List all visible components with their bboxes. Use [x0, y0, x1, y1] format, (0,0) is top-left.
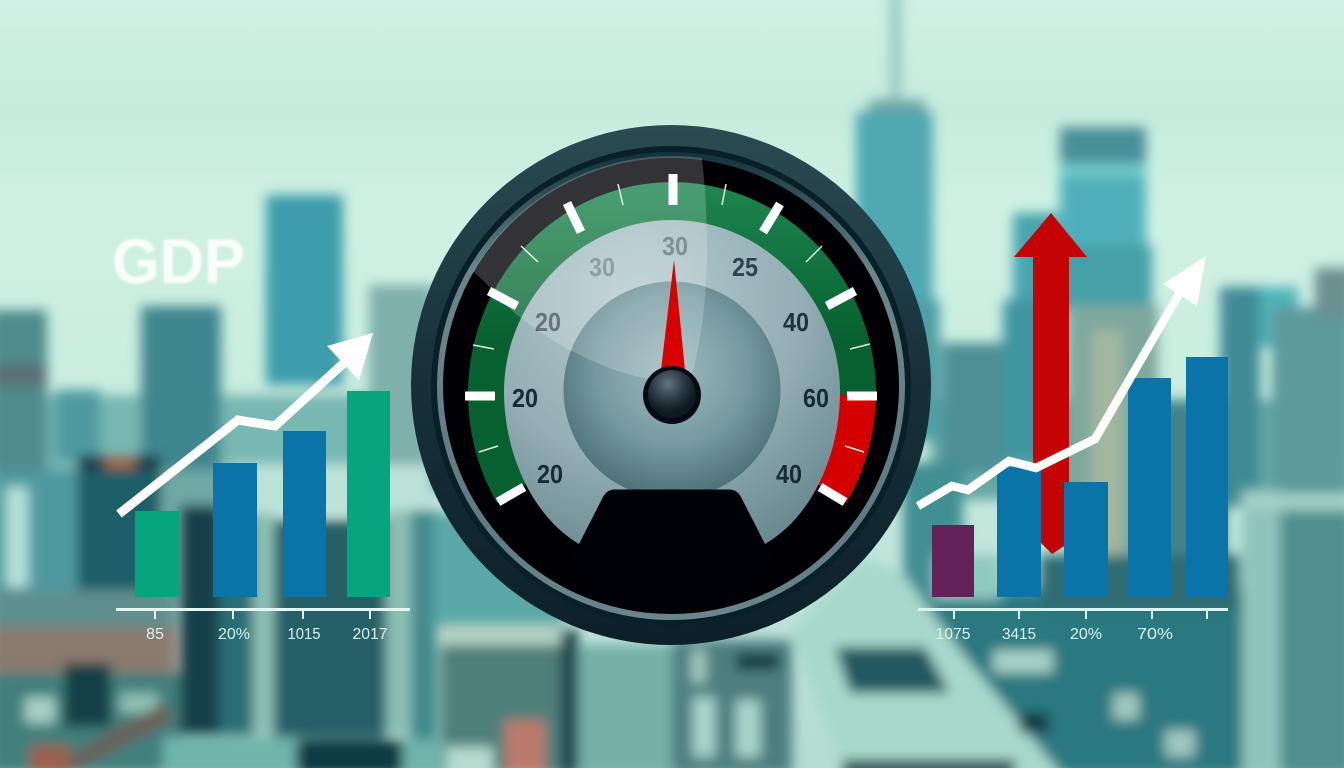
axis: left chart: 20% — [218, 626, 250, 643]
heading: GDP: GDP — [112, 227, 245, 297]
gauge red zone — [672, 388, 876, 503]
axis: left chart: 2017 — [352, 626, 388, 643]
axis: left chart — [116, 608, 410, 643]
gauge dial face — [504, 220, 840, 544]
axis: left chart: 85 — [146, 626, 164, 643]
axis: right chart: 20% — [1070, 626, 1102, 643]
axis: right chart: 3415 — [1002, 626, 1036, 643]
gauge inner disc — [564, 282, 780, 498]
axis: right chart: 1075 — [936, 626, 971, 643]
gauge scale numbers: 30 — [662, 231, 688, 261]
arrow: left rising trend — [119, 333, 373, 514]
gauge scale numbers: 20 — [535, 307, 561, 337]
gauge scale numbers — [512, 231, 829, 489]
right bar chart with red arrow — [918, 213, 1228, 643]
axis: right chart — [918, 608, 1228, 643]
arrow: red up arrow — [1014, 213, 1087, 554]
gauge scale numbers: 60 — [803, 383, 829, 413]
arrow: right rising trend — [918, 256, 1206, 506]
gauge major ticks — [465, 174, 877, 502]
bars: right chart — [932, 357, 1228, 597]
gauge scale numbers: 20 — [512, 383, 538, 413]
speedometer gauge — [411, 125, 931, 645]
gauge hub — [643, 366, 701, 424]
axis: left chart: 1015 — [288, 626, 321, 643]
bars: left chart — [135, 391, 390, 597]
gauge glass highlight — [473, 156, 707, 378]
gauge scale numbers: 20 — [537, 459, 563, 489]
gauge scale numbers: 40 — [776, 459, 802, 489]
gauge bottom black panel — [570, 490, 775, 600]
gauge scale numbers: 40 — [783, 307, 809, 337]
gauge needle — [661, 260, 685, 370]
gauge scale numbers: 25 — [732, 252, 758, 282]
gauge scale numbers: 30 — [589, 252, 615, 282]
axis: right chart: 70% — [1137, 626, 1173, 643]
gauge minor ticks — [473, 184, 870, 452]
left bar chart with GDP growth arrow — [112, 227, 410, 643]
gauge rim — [411, 125, 931, 645]
gauge green zone — [468, 182, 876, 503]
